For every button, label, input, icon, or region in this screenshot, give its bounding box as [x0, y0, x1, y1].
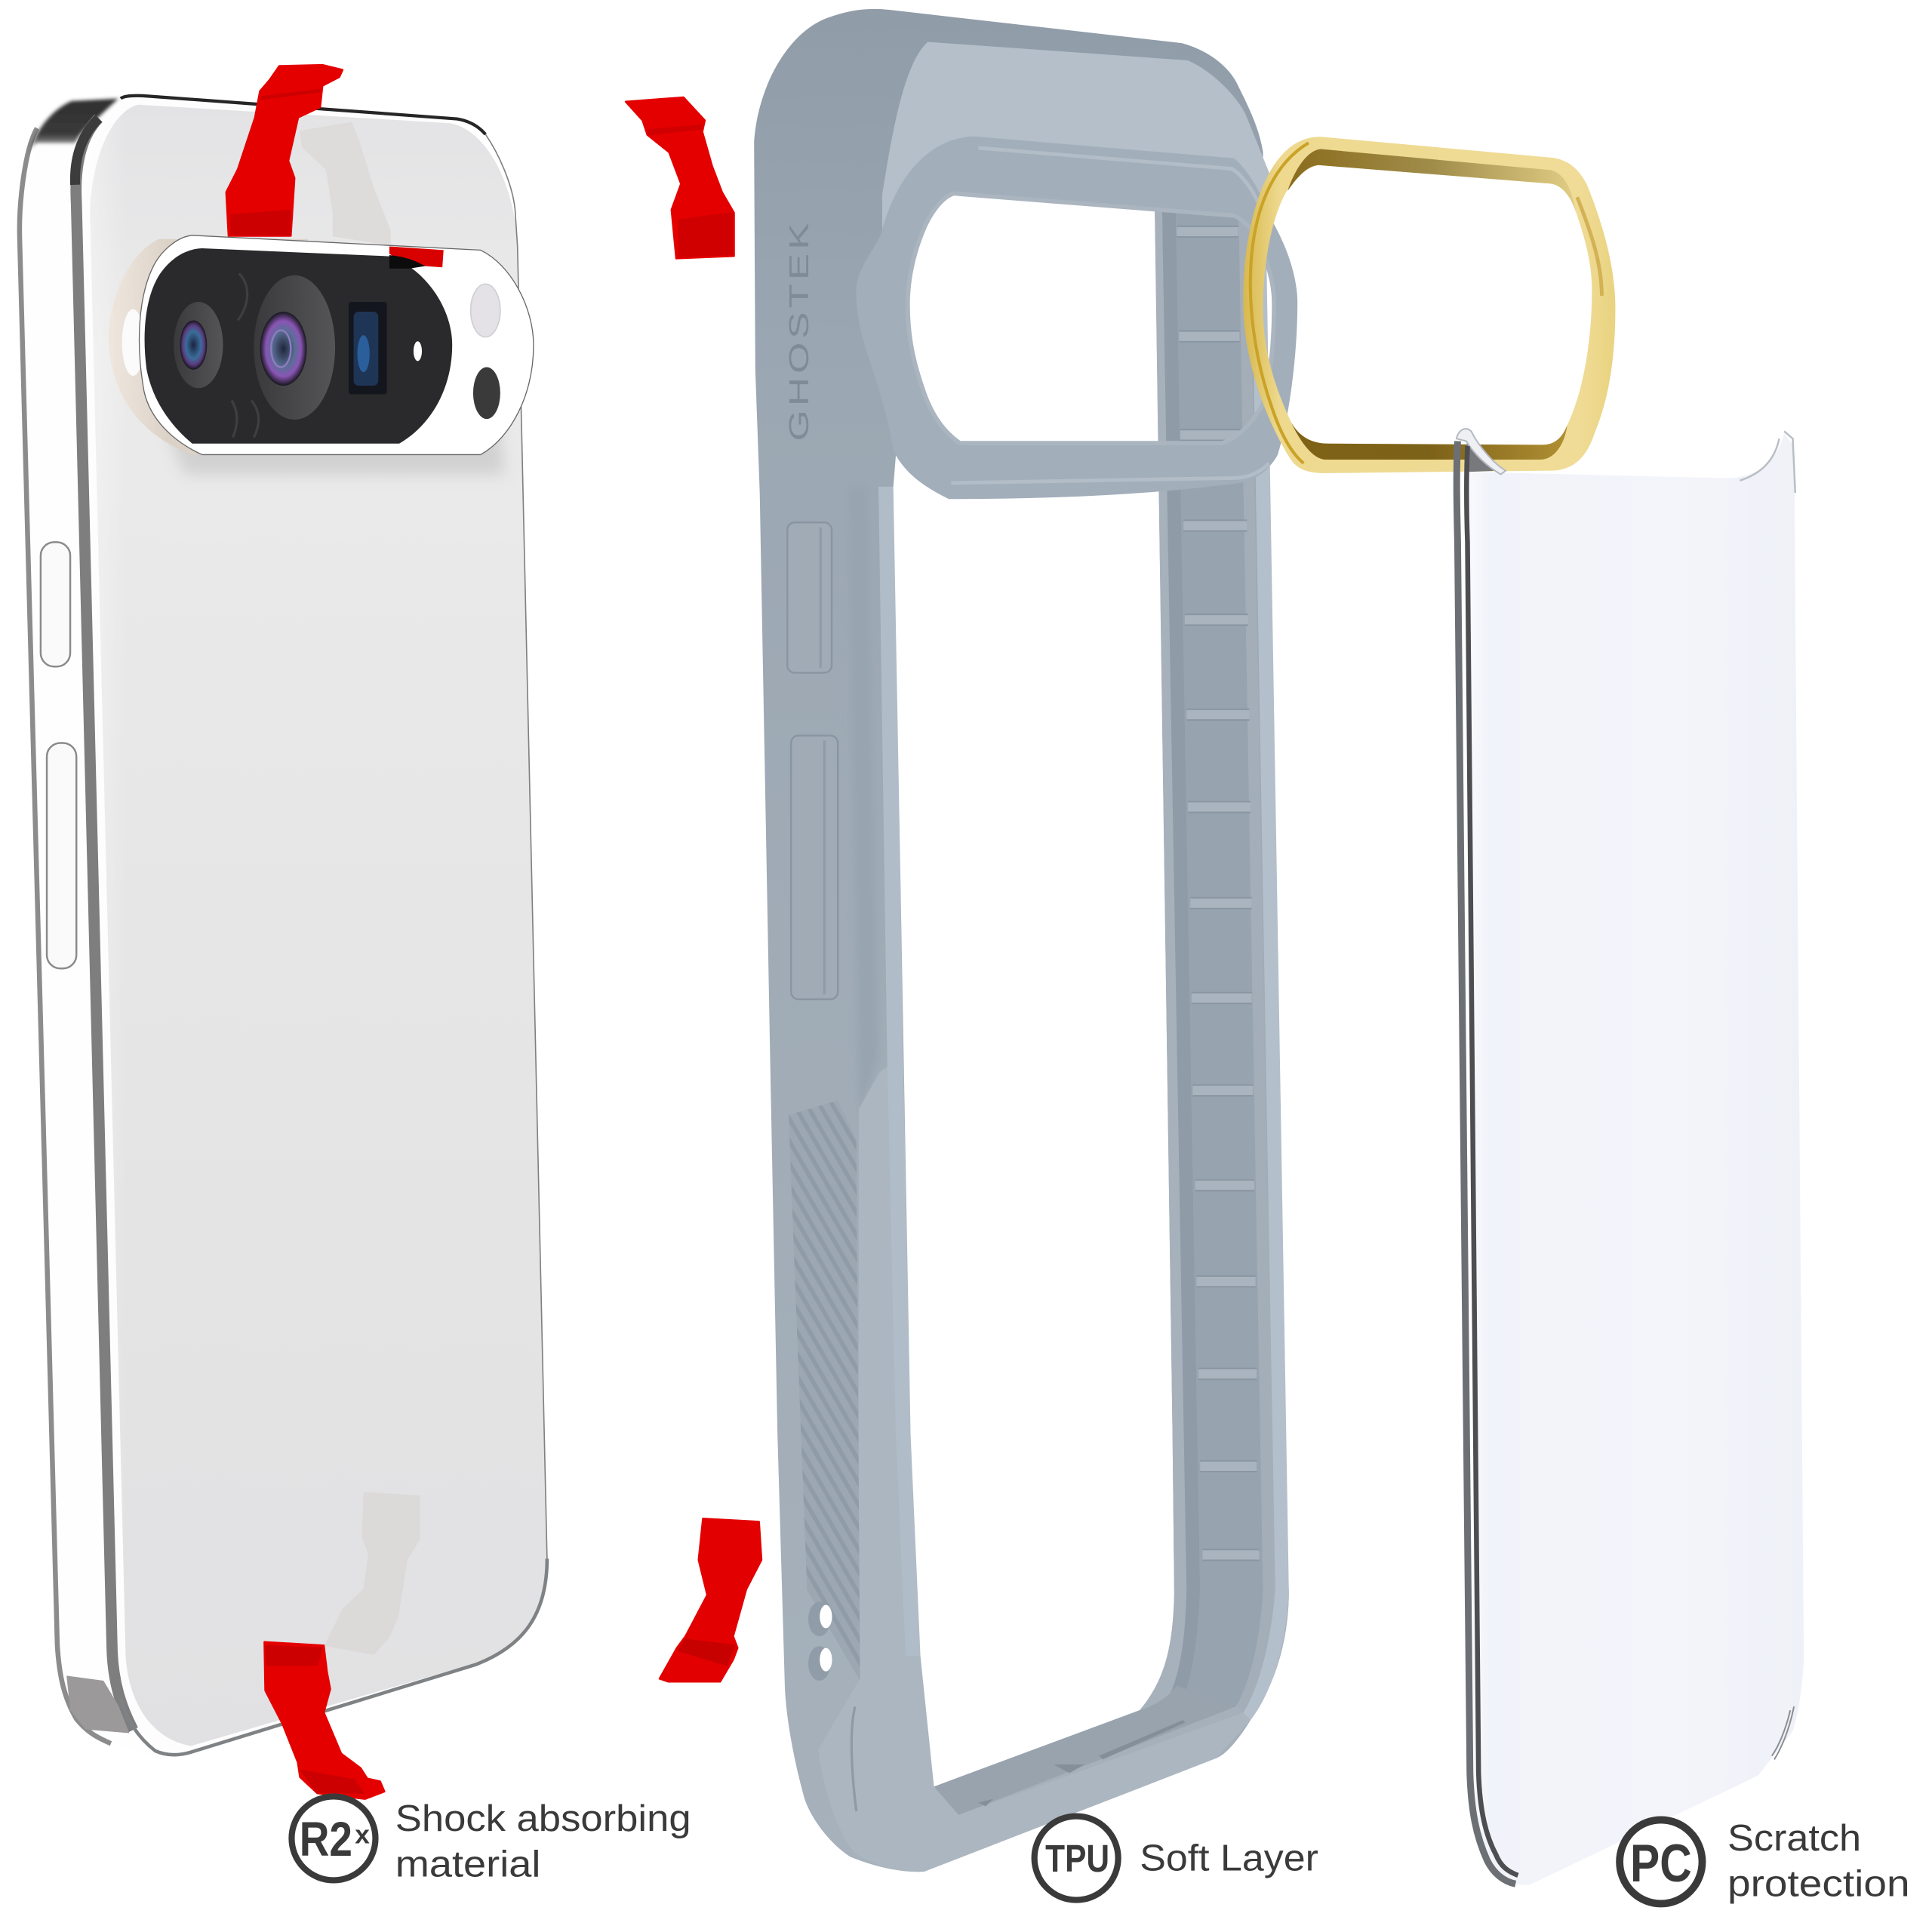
ring bottom band	[1291, 423, 1567, 460]
frame inner stripe	[76, 118, 133, 1730]
wall strip	[1140, 197, 1186, 1710]
sensor	[349, 302, 387, 394]
strap shade	[230, 89, 320, 235]
red strap bottom left	[264, 1642, 384, 1799]
top light panel	[882, 42, 1269, 234]
TPU frame	[754, 9, 1297, 1872]
volume button	[47, 743, 76, 968]
speaker hole top	[808, 1601, 832, 1636]
label: PC scratch protection	[1620, 1818, 1910, 1905]
frame silhouette	[754, 9, 1289, 1872]
R2x caption	[395, 1798, 691, 1885]
camera black panel	[145, 248, 452, 444]
clear PC shell	[1457, 429, 1804, 1885]
frame outer edge line	[20, 128, 111, 1743]
R2x badge: x	[355, 1820, 370, 1849]
wall cells	[1176, 197, 1263, 1706]
panel outer rim	[84, 99, 547, 1755]
back panel	[90, 105, 547, 1746]
ring step line	[951, 148, 1269, 483]
camera side white glint	[122, 309, 144, 376]
inner light strip	[878, 487, 921, 1656]
side shade band	[848, 487, 878, 1115]
shell top right tab	[1740, 431, 1795, 493]
microphone window	[473, 368, 500, 419]
panel left sheen	[90, 105, 547, 1746]
crescents	[232, 273, 259, 438]
shell left edge dark lines	[1457, 441, 1515, 1884]
ring right shine	[1577, 197, 1601, 296]
flash	[471, 284, 500, 337]
R2x badge	[291, 1796, 375, 1880]
ring opening lip	[908, 193, 1274, 443]
ring top band	[1287, 149, 1576, 212]
label: TPU soft layer	[1035, 1817, 1318, 1900]
shell grey tab shadow	[1466, 444, 1501, 472]
PC caption: Scratch	[1727, 1818, 1861, 1859]
wall ribs	[1177, 232, 1260, 1555]
camera ring	[856, 137, 1297, 499]
shell left tab	[1457, 429, 1506, 475]
PC caption: protection	[1727, 1864, 1910, 1905]
ghost strap top	[300, 123, 389, 244]
TPU badge	[1035, 1817, 1118, 1900]
shell left edge second line	[1466, 446, 1518, 1875]
strap shade	[678, 1638, 736, 1666]
camera shadow	[136, 357, 505, 475]
bottom wall	[934, 1685, 1236, 1815]
power button	[41, 542, 70, 666]
shell corner lines	[1772, 1706, 1794, 1759]
red strap through bar	[389, 247, 444, 267]
panel top edge	[121, 96, 485, 134]
strap shade	[647, 125, 733, 257]
frame inner stripe dark top	[75, 118, 99, 185]
red strap top left	[226, 65, 343, 235]
PC caption	[1727, 1818, 1910, 1905]
panel right edge	[485, 134, 547, 1558]
frame dark top corner	[27, 99, 118, 158]
large lens	[254, 275, 335, 420]
side button top	[787, 522, 832, 672]
ghost strap bottom	[326, 1494, 419, 1654]
PC badge	[1620, 1820, 1703, 1903]
wall rib shadows	[1177, 232, 1260, 1555]
logo text: GHOSTEK	[783, 220, 814, 441]
red strap top right	[626, 97, 734, 258]
speaker hole bottom	[808, 1646, 832, 1681]
ring left bright line	[1251, 143, 1309, 463]
R2x caption: Shock absorbing	[395, 1798, 691, 1839]
PC badge: PC	[1630, 1833, 1692, 1893]
wall outer band	[1236, 197, 1274, 1712]
side button bottom	[791, 736, 838, 999]
wall dark band	[1162, 197, 1200, 1706]
label: R2x shock absorbing material	[291, 1796, 691, 1885]
R2x caption: material	[395, 1844, 540, 1885]
bottom wall slot	[978, 1720, 1186, 1806]
gold camera ring	[1243, 137, 1615, 473]
phone metal frame	[17, 96, 210, 1757]
frame bottom grey block	[66, 1675, 129, 1733]
TPU badge: TPU	[1045, 1837, 1109, 1880]
phone	[17, 96, 547, 1757]
camera base beige	[109, 239, 308, 454]
shell body	[1470, 434, 1804, 1885]
panel bottom edge	[121, 1558, 547, 1755]
TPU caption: Soft Layer	[1140, 1838, 1318, 1878]
strap shade	[265, 1645, 365, 1794]
camera bar	[109, 235, 534, 454]
R2x badge: R2	[300, 1813, 352, 1866]
small lens	[174, 302, 223, 388]
front rim band	[818, 485, 1289, 1872]
camera bezel white	[140, 235, 534, 454]
white hole	[894, 185, 1174, 1786]
wall rim	[1243, 197, 1289, 1720]
lower seam	[851, 1706, 857, 1811]
red strap bottom right	[660, 1518, 761, 1681]
grip texture	[789, 1100, 860, 1681]
pin hole	[414, 341, 422, 361]
black corner	[389, 255, 425, 269]
